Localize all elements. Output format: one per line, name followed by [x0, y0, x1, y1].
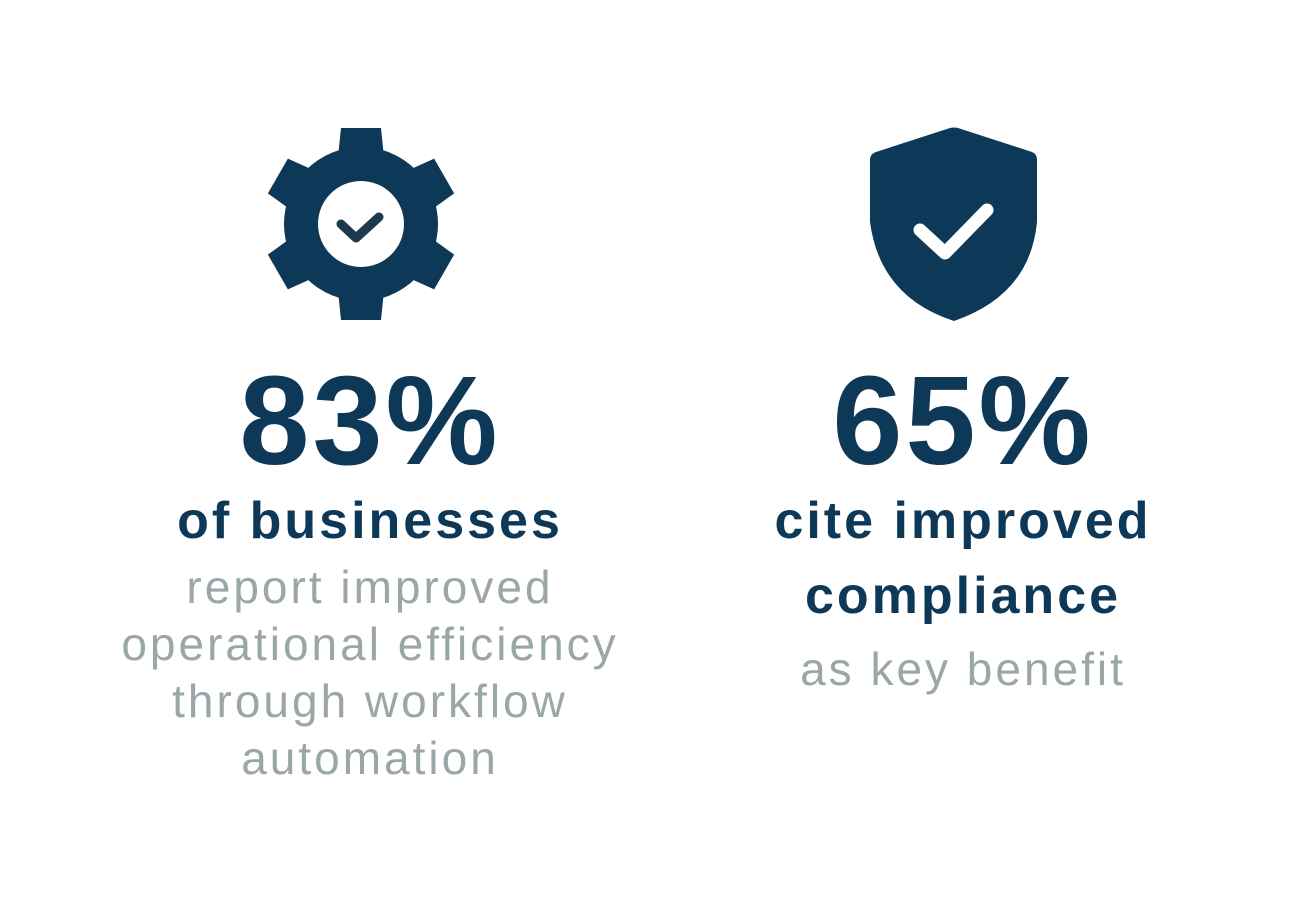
icon: shield with check	[870, 128, 1037, 321]
text: description left: operational efficiency	[121, 618, 619, 670]
text: description left: report improved	[186, 561, 554, 613]
stat: 83%: 83%	[239, 350, 501, 491]
panel: right stat	[774, 350, 1152, 695]
heading: cite improved compliance	[774, 492, 1152, 625]
heading: cite improved compliance: cite improved	[774, 492, 1152, 550]
text: description left: through workflow	[172, 675, 568, 727]
text: description left: automation	[241, 732, 499, 784]
stat: 65%: 65%	[832, 350, 1094, 491]
heading: cite improved compliance: compliance	[805, 567, 1121, 625]
heading: of businesses: of businesses	[177, 492, 563, 550]
panel: left stat	[121, 350, 619, 784]
text: description left	[121, 561, 619, 784]
text: description right: as key benefit	[800, 643, 1126, 695]
